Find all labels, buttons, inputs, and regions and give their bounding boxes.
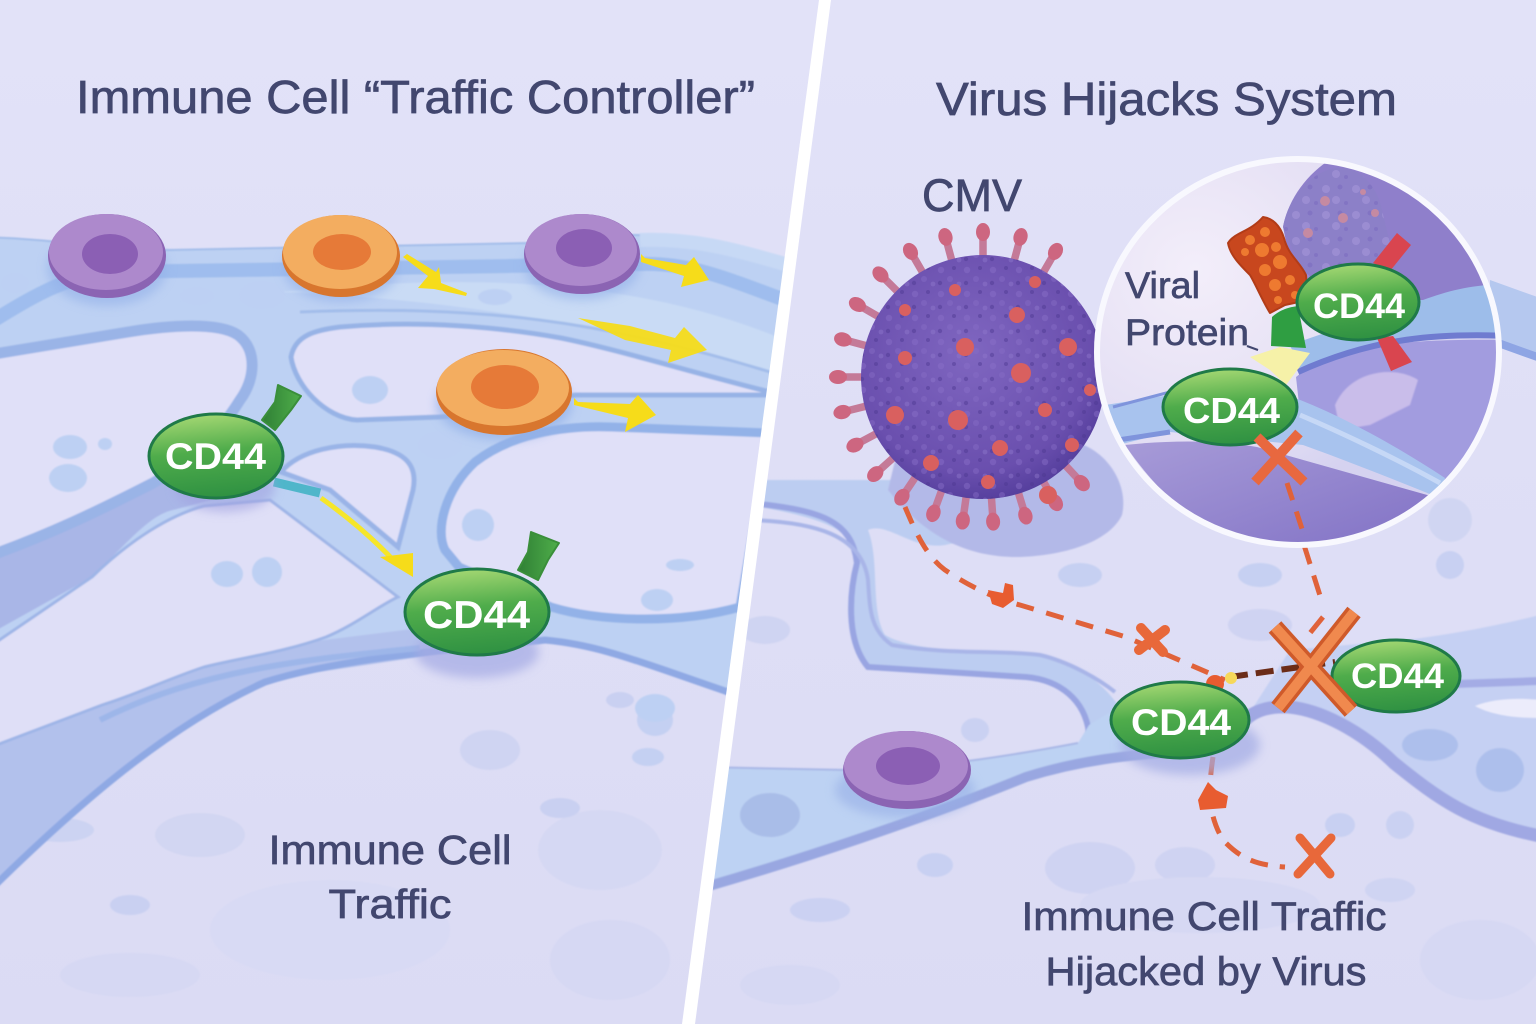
inset: CD44 upper: [1297, 264, 1419, 340]
inset upper vessel: [1290, 284, 1510, 370]
inset: CD44 lower: [1163, 369, 1297, 445]
divider: [682, 0, 831, 1024]
inset: viral protein: [1228, 217, 1308, 313]
arrow: yellow from purple cell: [641, 254, 709, 287]
label: Viral: Viral: [1125, 265, 1200, 306]
dashed path: blocked link: [1230, 662, 1335, 677]
blue blobs left: [48, 290, 694, 716]
label: CMV: CMV: [922, 170, 1022, 221]
body: [861, 255, 1105, 499]
tissue hole D: [291, 324, 770, 420]
label: CD44: CD44: [423, 594, 530, 637]
inset: green stem: [1271, 306, 1306, 348]
inset: leader line: [1247, 346, 1258, 350]
label: CD44: CD44: [1131, 702, 1231, 743]
caption: left: Immune Cell: [268, 827, 512, 873]
cell: orange 2: [436, 349, 572, 440]
arrow: yellow from orange cell: [403, 254, 467, 296]
label: CD44: CD44: [165, 436, 266, 477]
arrow: CD44 to CD44: [274, 482, 413, 577]
marker: small x lower: [1298, 838, 1331, 874]
panel: virus hijacks system: [695, 73, 1536, 1005]
vessel: lower left: [712, 724, 1161, 891]
upper-right vessel edge: [300, 310, 770, 372]
inset lower purple: [1125, 441, 1445, 556]
cell: orange 1: [282, 215, 400, 302]
tissue hole B: [0, 500, 398, 755]
icon: big red X: [1275, 612, 1354, 711]
dashed path: inset to X: [1304, 545, 1323, 633]
inset: yellow junction: [1250, 347, 1310, 385]
marker: blob on path: [988, 583, 1014, 608]
inset: magnifier circle: [1090, 150, 1510, 556]
vessel network left: [0, 235, 790, 910]
panel: immune cell traffic controller: [0, 79, 784, 919]
inset: red X: [1255, 433, 1304, 482]
marker: red bump on CD44: [1206, 675, 1224, 693]
label: CD44: CD44: [1183, 390, 1280, 431]
label: CD44: CD44: [1351, 657, 1445, 696]
vessel: right: [1245, 615, 1536, 838]
spikes: [829, 223, 1093, 531]
inset lower body: [1296, 340, 1510, 490]
tissue blobs left: [48, 692, 674, 915]
cell: CD44 centre: [1111, 682, 1260, 775]
cell: purple lower: [835, 731, 975, 818]
inset purple backdrop: [1283, 150, 1510, 310]
tissue hole E: [281, 446, 414, 547]
arrow: yellow from orange cell 2: [574, 395, 656, 432]
cell: CD44 lower: [405, 532, 559, 678]
icon: receptor stem: [262, 385, 301, 430]
arrow: yellow mid vessel: [578, 318, 707, 363]
inset: red receptor bars: [1373, 233, 1412, 371]
vessel: upper left: [750, 480, 1130, 735]
tissue hole A: [0, 326, 252, 563]
inset: dashed line: [1287, 483, 1304, 535]
virus: CMV: [829, 223, 1105, 531]
marker: blob on lower path: [1198, 782, 1228, 810]
heading: right: Virus Hijacks System: [936, 73, 1397, 125]
cell: CD44 left: [149, 385, 301, 512]
dashed path: CD44 downward: [1210, 757, 1285, 867]
dashed path: virus to CD44: [905, 507, 1225, 680]
label: Protein: Protein: [1125, 312, 1249, 353]
inset ring: [1097, 159, 1499, 545]
caption: right: Immune Cell Traffic: [1022, 895, 1386, 939]
lower network edge: [0, 640, 728, 910]
marker: small x upper: [1139, 628, 1165, 652]
label: CD44: CD44: [1313, 287, 1406, 326]
caption: left line 2: Traffic: [328, 881, 452, 927]
cell: purple 1: [47, 214, 167, 306]
red knobs: [886, 276, 1096, 504]
shadow under virus: [888, 440, 1123, 557]
heading: left: Immune Cell “Traffic Controller”: [76, 71, 755, 123]
cell: purple 2: [524, 214, 640, 300]
inset virus: [1283, 168, 1400, 290]
tissue blobs right: [746, 498, 1472, 922]
caption: right line 2: Hijacked by Virus: [1046, 950, 1366, 994]
cell: CD44 right: [1332, 640, 1460, 712]
tissue hole C: [441, 427, 770, 619]
inset lower vessel: [1105, 395, 1445, 498]
marker: glow dot: [1225, 672, 1237, 684]
icon: receptor stem: [518, 532, 559, 580]
vessel: far right behind inset: [1490, 280, 1536, 360]
